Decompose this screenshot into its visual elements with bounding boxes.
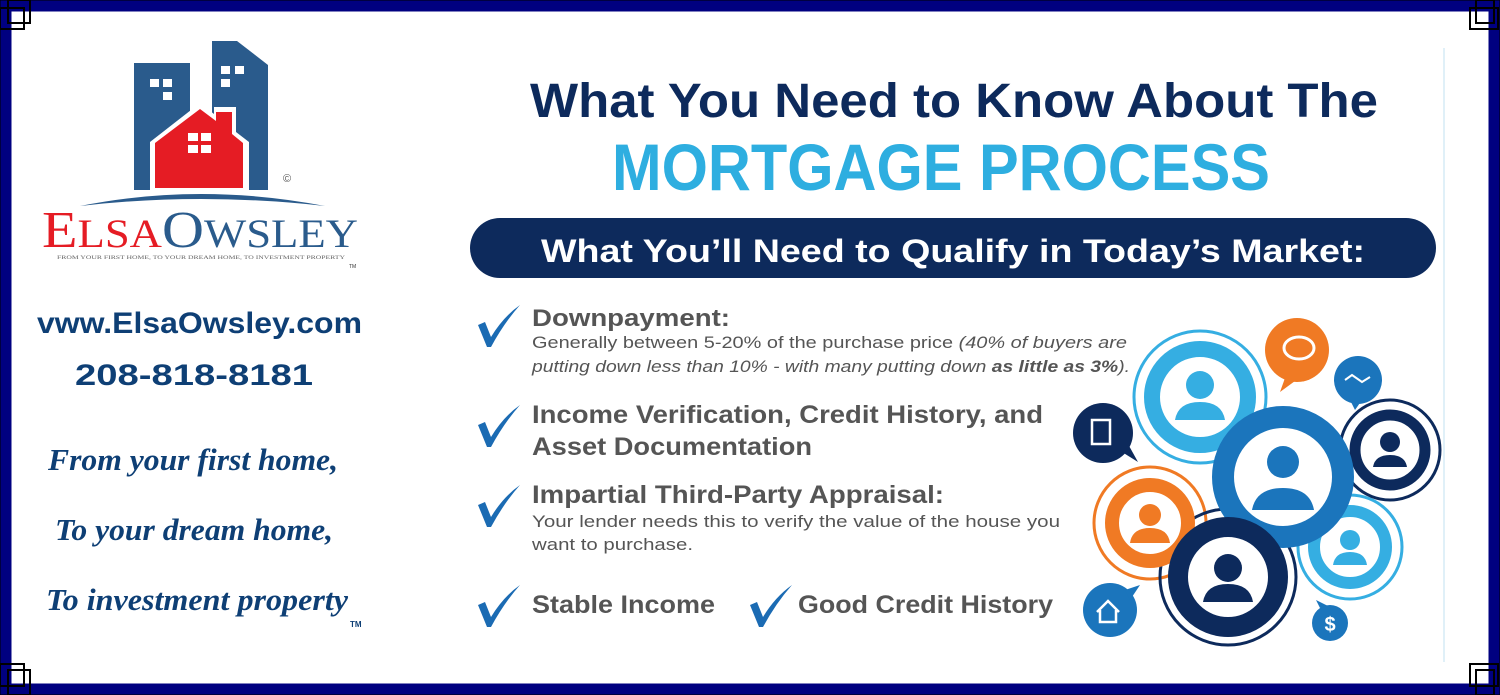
checklist: Downpayment: [532, 305, 730, 332]
tagline script: To your dream home, [55, 512, 333, 547]
title [530, 75, 1378, 204]
checklist: Impartial Third-Party Appraisal: [532, 481, 944, 509]
phone number: 208-818-8181 [75, 359, 313, 392]
checklist: Asset Documentation [532, 433, 812, 461]
checklist: Generally between 5-20% of the purchase price (40% of buyers are [532, 333, 1127, 352]
people network illustration [1073, 318, 1440, 645]
website url: vww.ElsaOwsley.com [37, 307, 362, 340]
tagline script [46, 442, 362, 629]
checklist: putting down less than 10% - with many putting down as little as 3% ). [531, 357, 1130, 376]
logo [42, 41, 358, 270]
checklist [478, 305, 1130, 627]
tagline script: TM [350, 620, 362, 629]
logo: FROM YOUR FIRST HOME, TO YOUR DREAM HOME, TO INVESTMENT PROPERTY [57, 255, 345, 261]
banner: What You’ll Need to Qualify in Today’s Market: [541, 233, 1365, 269]
logo: TM [349, 264, 356, 270]
people network illustration: $ [1324, 614, 1336, 636]
banner [470, 218, 1436, 278]
logo: ELSAOWSLEY [42, 202, 358, 259]
title: What You Need to Know About The [530, 75, 1378, 128]
content panel [470, 48, 1444, 662]
checklist: Income Verification, Credit History, and [532, 401, 1043, 429]
checklist: want to purchase. [531, 535, 693, 554]
tagline script: To investment property [46, 582, 348, 617]
checklist: Your lender needs this to verify the value of the house you [532, 512, 1060, 531]
tagline script: From your first home, [47, 442, 338, 477]
title: MORTGAGE PROCESS [612, 130, 1270, 204]
checklist: Stable Income [532, 591, 715, 619]
checklist: Good Credit History [798, 591, 1053, 619]
logo: © [283, 173, 291, 185]
